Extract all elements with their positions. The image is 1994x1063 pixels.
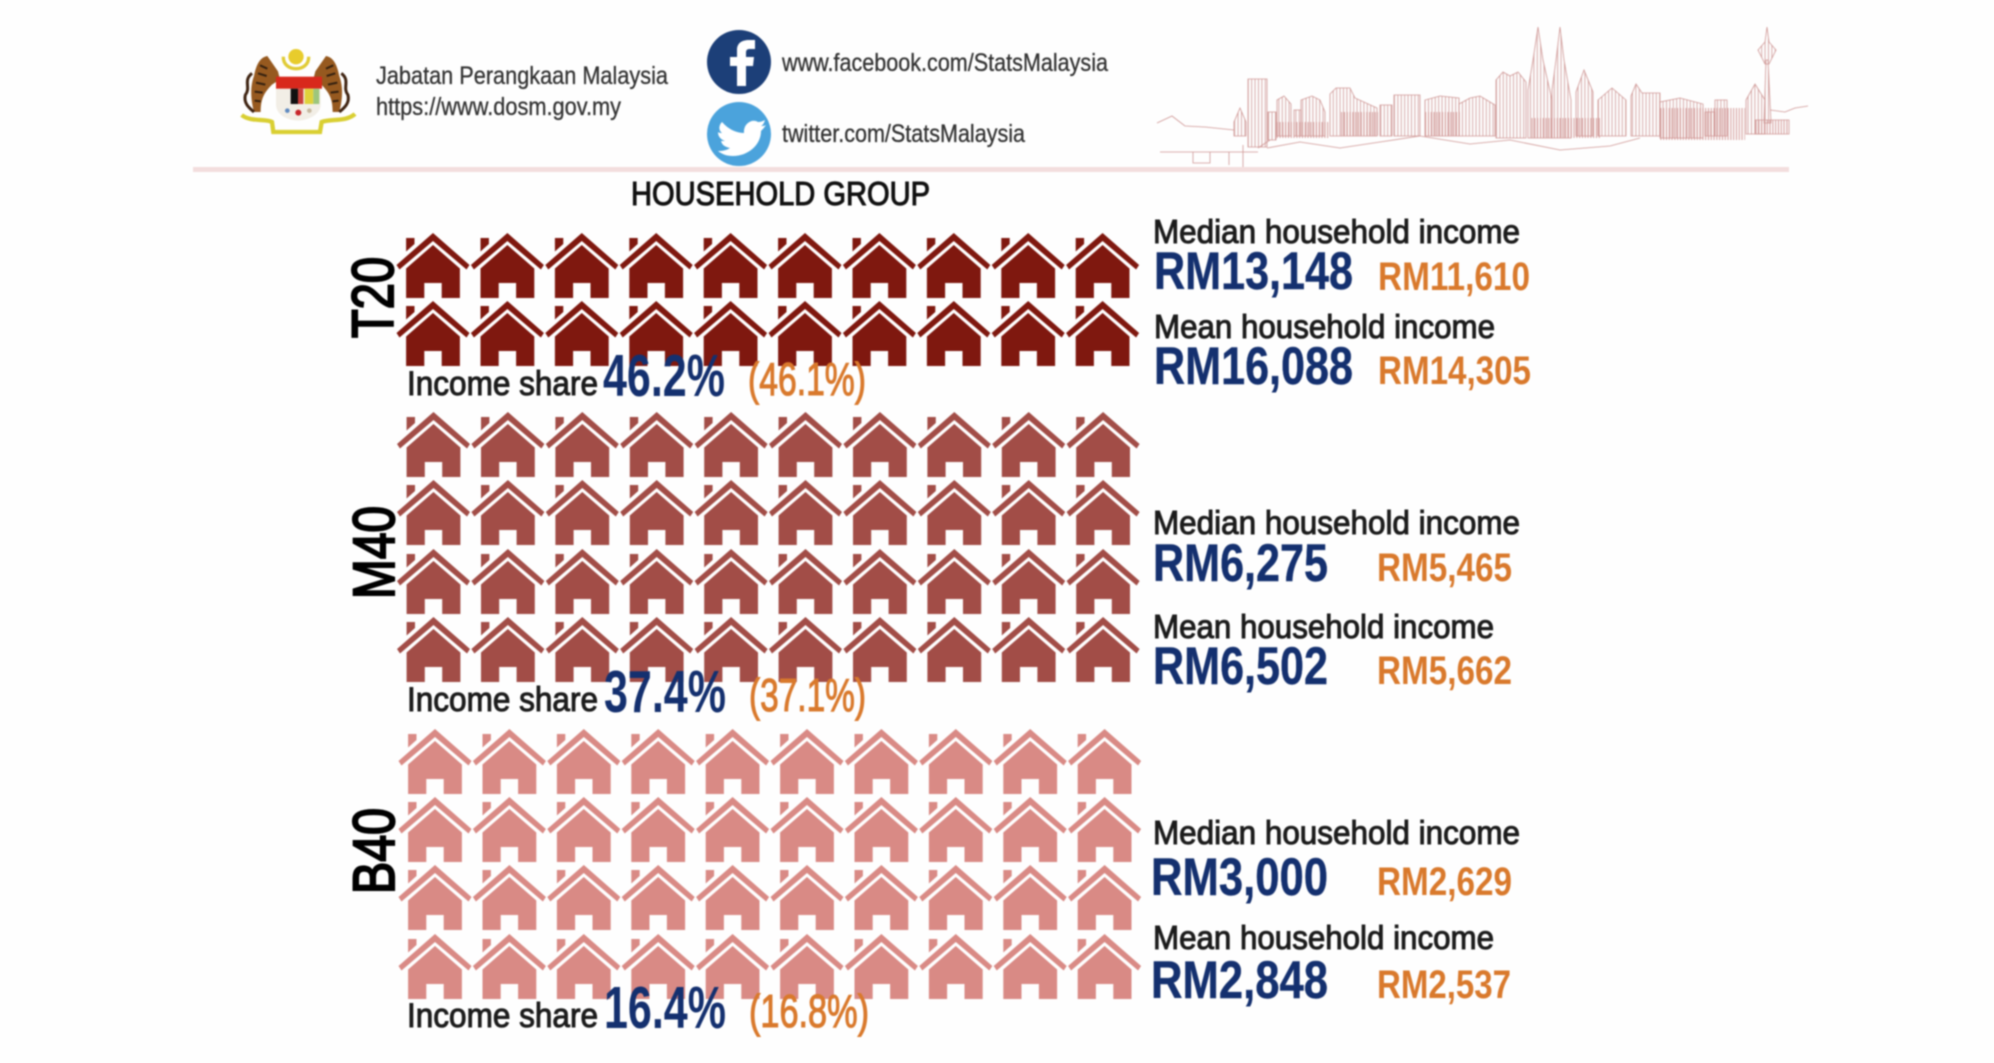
icon: facebook xyxy=(707,30,771,94)
B40 income share: 16.4% xyxy=(604,975,726,1041)
T20 income share: Income share xyxy=(407,365,598,403)
B40 income figures: RM2,537 xyxy=(1377,963,1511,1007)
B40 label: B40 xyxy=(342,808,407,894)
T20 income figures: RM16,088 xyxy=(1154,337,1353,396)
M40 income figures: RM5,662 xyxy=(1377,649,1512,693)
panel: M40 xyxy=(342,412,1520,725)
T20 income figures: Mean household income xyxy=(1154,308,1495,345)
T20 income figures: RM13,148 xyxy=(1154,242,1353,301)
T20 label: T20 xyxy=(341,257,406,338)
B40 income figures: Median household income xyxy=(1153,814,1520,851)
M40 income figures: RM5,465 xyxy=(1377,546,1512,590)
header xyxy=(193,27,1808,172)
B40 income share xyxy=(407,975,869,1041)
M40 label: M40 xyxy=(342,506,407,599)
B40 income figures: Mean household income xyxy=(1153,919,1494,956)
B40 income share: (16.8%) xyxy=(749,985,869,1037)
heading: household group: HOUSEHOLD GROUP xyxy=(631,175,930,212)
T20 income figures: RM14,305 xyxy=(1378,349,1531,393)
T20 income figures xyxy=(1153,213,1531,396)
B40 house pictogram xyxy=(398,729,1141,999)
organisation website: https://www.dosm.gov.my xyxy=(376,93,621,121)
M40 income figures xyxy=(1153,504,1520,696)
header rule xyxy=(193,167,1789,172)
B40 income figures: RM2,848 xyxy=(1151,951,1328,1010)
B40 income figures xyxy=(1151,814,1520,1010)
M40 income figures: Mean household income xyxy=(1153,608,1494,645)
M40 income share: (37.1%) xyxy=(749,669,866,721)
T20 income share: (46.1%) xyxy=(748,353,866,405)
B40 income share: Income share xyxy=(407,997,598,1035)
M40 income figures: Median household income xyxy=(1153,504,1520,541)
M40 income share: Income share xyxy=(407,681,598,719)
M40 house pictogram xyxy=(397,412,1140,682)
facebook address: www.facebook.com/StatsMalaysia xyxy=(781,49,1108,77)
T20 house pictogram xyxy=(396,233,1139,366)
illustration: Kuala Lumpur skyline xyxy=(1157,27,1808,167)
M40 income figures: RM6,502 xyxy=(1153,637,1328,696)
T20 income figures: Median household income xyxy=(1153,213,1520,250)
T20 income figures: RM11,610 xyxy=(1378,255,1530,299)
M40 income share: 37.4% xyxy=(604,659,726,725)
B40 income figures: RM3,000 xyxy=(1151,848,1328,907)
panel: B40 xyxy=(342,729,1520,1041)
twitter address: twitter.com/StatsMalaysia xyxy=(782,120,1025,148)
M40 income figures: RM6,275 xyxy=(1153,534,1328,593)
T20 income share: 46.2% xyxy=(603,343,725,409)
B40 income figures: RM2,629 xyxy=(1377,860,1512,904)
icon: twitter xyxy=(707,102,771,166)
T20 income share xyxy=(407,343,866,409)
organisation name: Jabatan Perangkaan Malaysia xyxy=(376,62,668,90)
panel: T20 xyxy=(341,213,1531,409)
M40 income share xyxy=(407,659,866,725)
icon: Malaysia coat of arms xyxy=(242,49,355,132)
